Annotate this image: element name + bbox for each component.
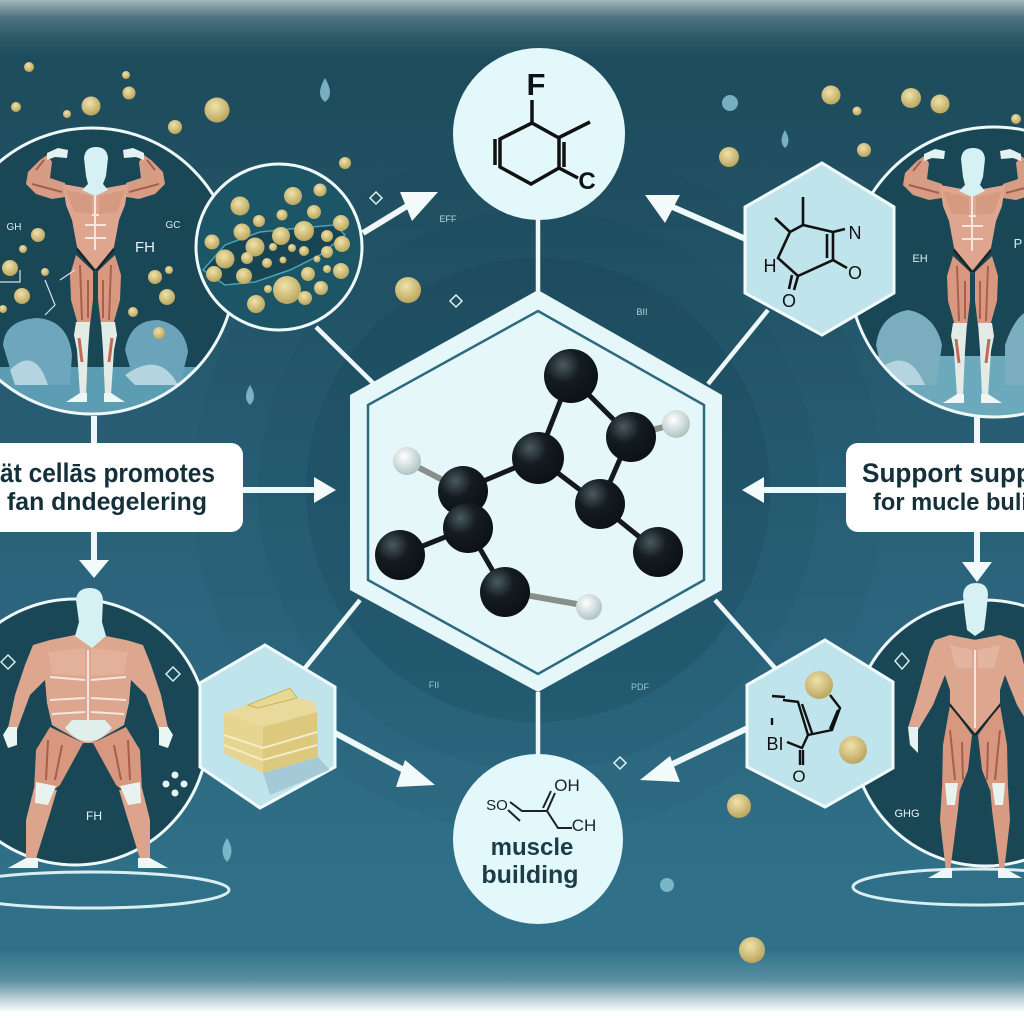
panel: bottom right bodybuilder: GHG	[894, 808, 920, 820]
panel: top right bodybuilder	[840, 127, 1024, 426]
small labels and diamonds: EFF	[440, 214, 457, 224]
small labels and diamonds: FII	[429, 680, 439, 690]
bottom circle: muscle building: SO	[486, 797, 508, 814]
icon: left hexagon butter	[200, 645, 335, 808]
arrowheads	[79, 192, 992, 787]
icon: right hexagon gold molecule	[747, 640, 893, 807]
top circle: chemical structure: F	[527, 67, 545, 102]
small labels and diamonds: BII	[636, 307, 648, 317]
concentric rings	[193, 145, 883, 835]
top speckled edge	[0, 0, 1024, 60]
bottom circle: muscle building: building	[481, 861, 579, 889]
icon: right hexagon structure: H	[764, 256, 776, 276]
panel: top right bodybuilder: P	[1014, 236, 1022, 251]
small labels and diamonds	[370, 192, 650, 769]
label: left text box: ät cellās promotes	[0, 458, 215, 488]
panel: bottom right bodybuilder	[852, 583, 1024, 905]
panel: top right bodybuilder: EH	[912, 253, 928, 265]
top circle: chemical structure	[453, 48, 625, 220]
bottom circle: muscle building: OH	[554, 776, 580, 795]
label: right text box	[846, 443, 1024, 532]
label: left text box: fan dndegelering	[7, 488, 207, 516]
molecule	[375, 349, 690, 620]
panel: bottom left bodybuilder: FH	[86, 809, 102, 823]
icon: right hexagon structure: O	[782, 291, 796, 311]
icon: right hexagon gold molecule: O	[792, 767, 806, 786]
center hexagon	[350, 290, 722, 692]
panel: bottom left bodybuilder	[0, 588, 229, 908]
small labels and diamonds: PDF	[631, 682, 650, 692]
icon: right hexagon structure: N	[848, 223, 862, 243]
bottom speckled edge	[0, 950, 1024, 1024]
panel: top left bodybuilder: FH	[135, 239, 155, 256]
connectors	[94, 203, 977, 776]
panel: top left bodybuilder	[0, 128, 240, 427]
bottom circle: muscle building: muscle	[491, 834, 573, 861]
bottom circle: muscle building	[453, 754, 623, 924]
icon: right hexagon gold molecule: BI	[766, 734, 784, 754]
top circle: chemical structure: C	[578, 168, 596, 195]
water drops	[222, 78, 788, 892]
panel: top left bodybuilder: GC	[166, 220, 180, 231]
icon: right hexagon structure: O	[848, 263, 862, 283]
icon: right hexagon structure	[745, 163, 894, 335]
bottom circle: muscle building: CH	[572, 816, 596, 835]
label: left text box	[0, 443, 243, 532]
panel: top left bodybuilder: GH	[6, 222, 22, 233]
icon: fat cells circle	[196, 164, 362, 330]
